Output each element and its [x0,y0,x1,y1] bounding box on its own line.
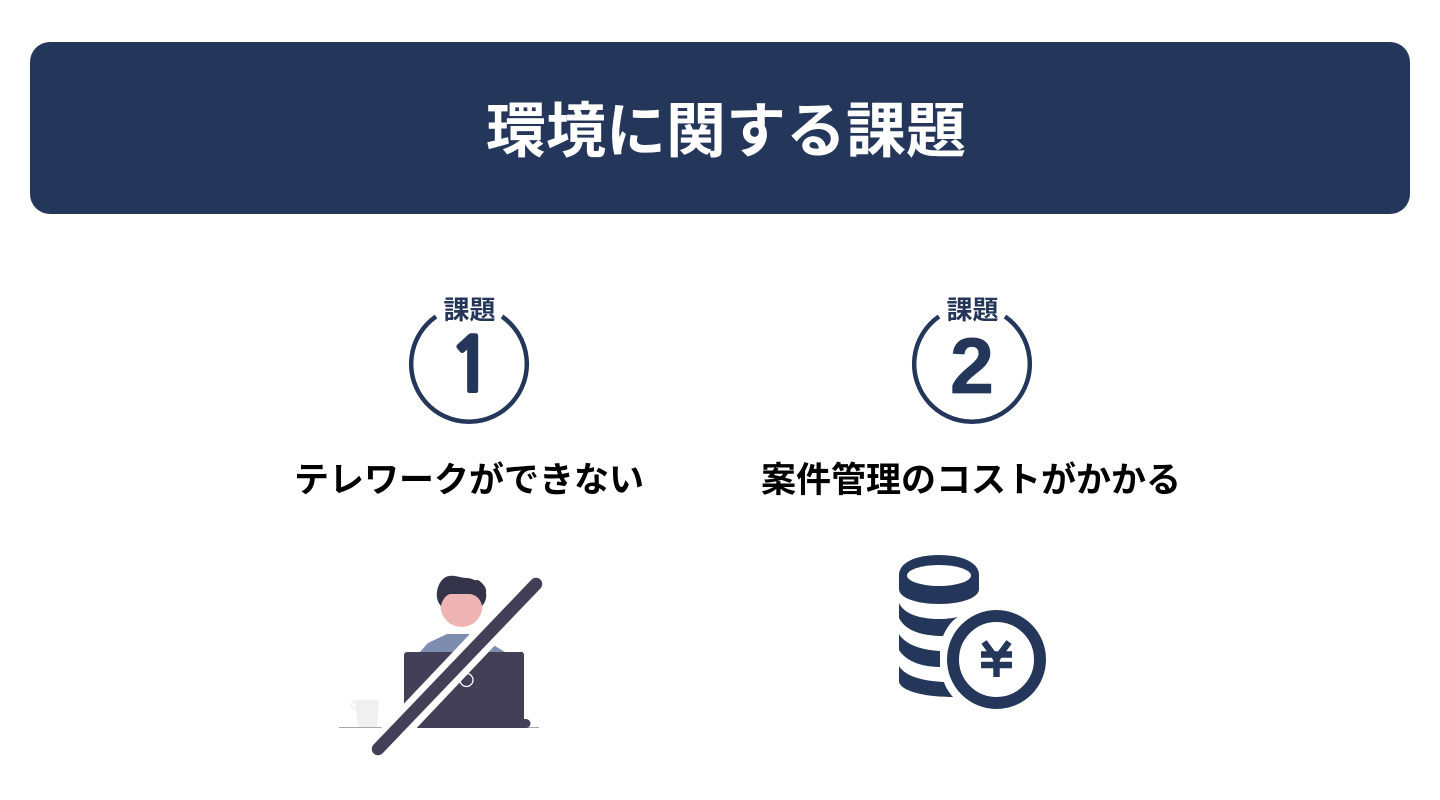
yen coin [953,616,1040,703]
icon: person at laptop crossed out [339,576,539,750]
top coin [899,555,979,604]
slash [378,584,536,749]
badge: issue 1: 1 [448,330,494,404]
hair [437,576,486,606]
title banner [30,42,1410,214]
panel: issue 1 [294,295,644,750]
face [440,585,482,627]
title: 環境に関する課題 [486,98,966,165]
panel: issue 2 [761,295,1181,703]
stacked coin bands [899,603,958,636]
badge: issue 2: 課題 [946,295,999,325]
badge: issue 1: 課題 [443,295,496,325]
desk line [339,727,539,728]
badge: issue 2 [914,295,1030,422]
heading: issue 1: テレワークができない [294,461,644,500]
icon: coin stack with yen coin [899,555,1040,703]
badge: issue 2: 2 [950,321,994,410]
cup [352,700,379,727]
yen symbol [981,642,1012,677]
badge: issue 1 [411,295,527,422]
laptop logo [460,674,473,686]
laptop [404,652,530,728]
heading: issue 2: 案件管理のコストがかかる [761,461,1181,500]
shoulders [420,634,505,652]
white gap around slash [378,582,537,750]
